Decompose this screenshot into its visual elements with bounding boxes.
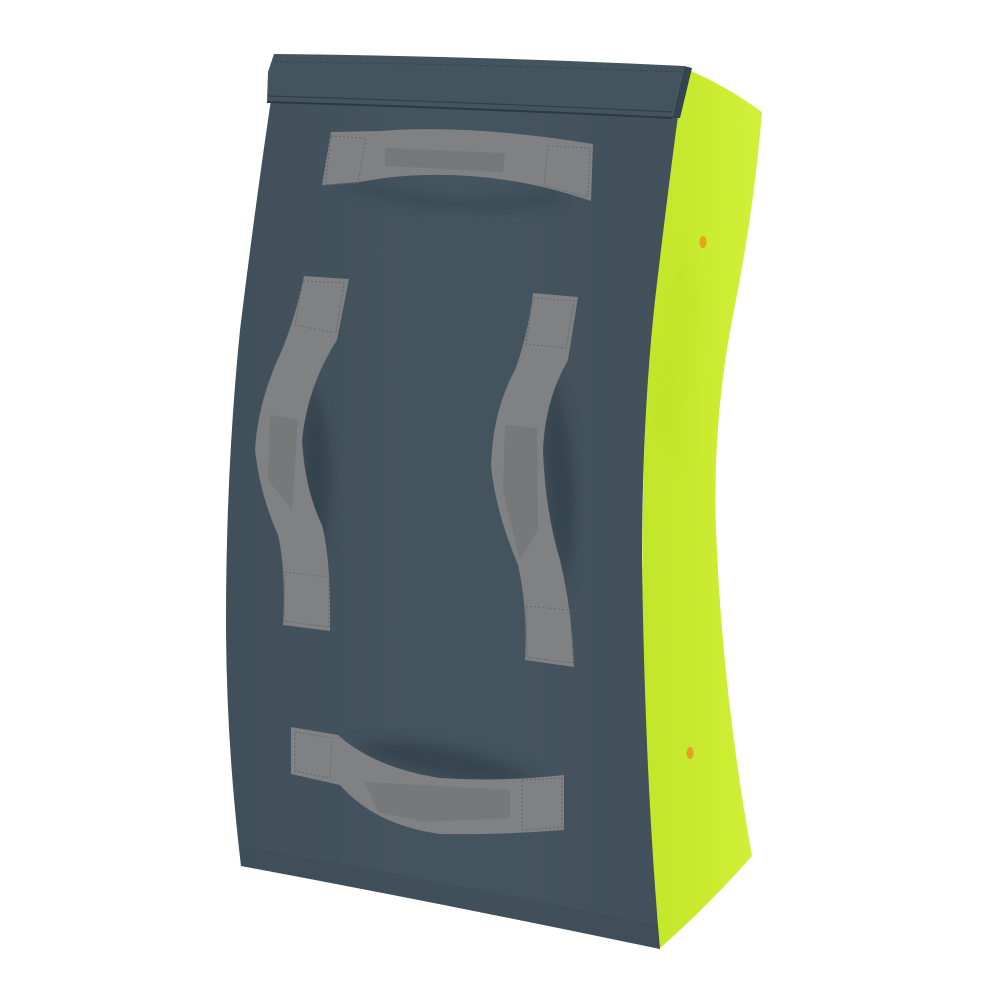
icon: lower eyelet bbox=[686, 747, 694, 759]
bottom handle bbox=[291, 727, 564, 834]
dark front panel bbox=[226, 100, 678, 949]
green side panel bbox=[642, 68, 762, 949]
left handle bbox=[255, 276, 349, 631]
right handle bbox=[491, 293, 578, 667]
icon: upper eyelet bbox=[700, 236, 706, 248]
top handle bbox=[322, 129, 593, 208]
top flap bbox=[267, 54, 692, 118]
